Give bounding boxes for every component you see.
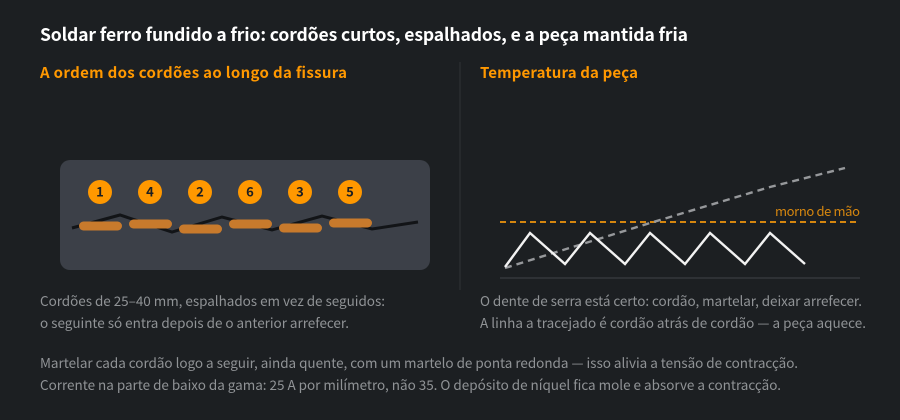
dashed line: bead after bead [505, 168, 845, 268]
caption: temperature: O dente de serra está certo: cordão, martelar, deixar arrefecer. [480, 290, 862, 310]
title: Soldar ferro fundido a frio: cordões curtos, espalhados, e a peça mantida fria [40, 22, 688, 47]
closing notes: Corrente na parte de baixo da gama: 25 A por milímetro, não 35. O depósito de níquel fica mole e absorve a contracção. [40, 374, 781, 394]
sawtooth line: correct method [505, 233, 805, 267]
closing notes: Martelar cada cordão logo a seguir, ainda quente, com um martelo de ponta redonda — isso alivia a tensão de contracção. [40, 352, 798, 372]
closing notes [40, 352, 798, 394]
diagram: bead order along the crack [60, 160, 430, 270]
sequence numbers: 6 [246, 182, 254, 200]
sequence numbers: 1 [96, 182, 104, 200]
threshold label: morno de mão [775, 201, 860, 220]
sequence numbers: 4 [146, 182, 154, 200]
crack line [72, 215, 418, 232]
caption: temperature [480, 290, 866, 332]
panel: cast iron plate [60, 160, 430, 270]
sequence numbers: 5 [346, 182, 354, 200]
sequence numbers: 2 [196, 182, 204, 200]
chart: part temperature [500, 168, 860, 278]
sequence numbers [88, 180, 362, 204]
heading: bead order: A ordem dos cordões ao longo da fissura [39, 62, 347, 83]
weld beads [79, 218, 372, 234]
caption: bead order: o seguinte só entra depois de o anterior arrefecer. [40, 312, 349, 332]
caption: bead order: Cordões de 25–40 mm, espalhados em vez de seguidos: [40, 290, 385, 310]
sequence numbers: 3 [296, 182, 304, 200]
hand-warm threshold line [500, 221, 860, 223]
caption: bead order [40, 290, 385, 332]
heading: part temperature: Temperatura da peça [480, 62, 638, 83]
caption: temperature: A linha a tracejado é cordão atrás de cordão — a peça aquece. [480, 312, 866, 332]
